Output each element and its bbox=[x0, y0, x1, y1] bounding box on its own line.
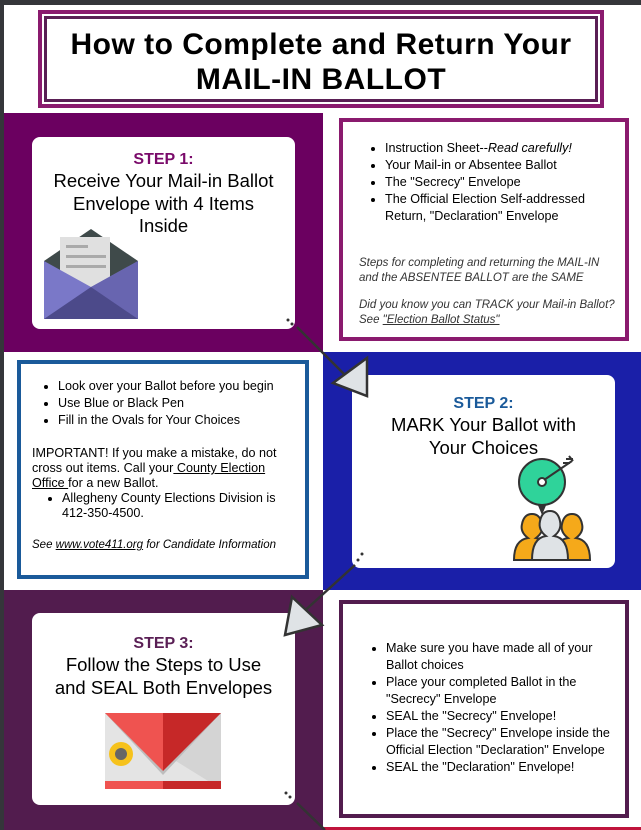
panel: step 2 instructions box: See www.vote411.org for Candidate Information bbox=[32, 539, 276, 551]
text: step 1 title bbox=[53, 170, 274, 236]
panel: step 1 items box: Your Mail-in or Absentee Ballot bbox=[385, 158, 557, 172]
text: step 3 title: and SEAL Both Envelopes bbox=[55, 676, 272, 698]
text: step 1 title: Inside bbox=[139, 215, 188, 236]
title: MAIL-IN BALLOT bbox=[196, 63, 446, 96]
text: step 3 title: Follow the Steps to Use bbox=[66, 654, 261, 675]
heading: step 1: STEP 1: bbox=[133, 151, 194, 168]
icon: target and people bbox=[513, 455, 591, 561]
panel: step 3 background bbox=[4, 590, 323, 830]
panel: step 2 background bbox=[323, 352, 641, 590]
panel: step 3 card bbox=[32, 613, 295, 805]
title bbox=[38, 10, 604, 108]
panel: step 2 instructions box bbox=[17, 360, 309, 579]
heading: step 3: STEP 3: bbox=[133, 635, 194, 652]
panel: step 2 instructions box: Use Blue or Black Pen bbox=[58, 396, 184, 410]
text: step 1 title: Envelope with 4 Items bbox=[73, 192, 254, 214]
panel: step 1 background bbox=[4, 113, 323, 352]
panel: step 3 instructions box: Make sure you have made all of your Ballot choices bbox=[386, 641, 593, 672]
text: step 3 title bbox=[55, 654, 272, 698]
title: How to Complete and Return Your bbox=[70, 28, 572, 61]
dark frame edges bbox=[0, 0, 641, 5]
panel: step 1 items box: The Official Election Self-addressed Return, "Declaration" Envelope bbox=[385, 192, 585, 223]
panel: step 2 instructions box: Fill in the Ovals for Your Choices bbox=[58, 413, 240, 427]
panel: step 1 items box bbox=[339, 118, 629, 341]
panel: step 2 instructions box: Allegheny County Elections Division is 412-350-4500. bbox=[62, 491, 276, 520]
panel: step 3 instructions box: Place your completed Ballot in the "Secrecy" Envelope bbox=[386, 675, 576, 706]
panel: step 3 instructions box: SEAL the "Secrecy" Envelope! bbox=[386, 709, 556, 723]
panel: step 1 items box: The "Secrecy" Envelope bbox=[385, 175, 521, 189]
panel: step 3 instructions box bbox=[339, 600, 629, 818]
panel: step 2 card bbox=[352, 375, 615, 568]
panel: step 1 items box: Did you know you can TRACK your Mail-in Ballot? See "Election Ballot Status" bbox=[359, 299, 615, 326]
panel: step 1 card bbox=[32, 137, 295, 329]
heading: step 2: STEP 2: bbox=[453, 395, 514, 412]
text: step 2 title: MARK Your Ballot with bbox=[391, 414, 576, 435]
text: step 2 title: Your Choices bbox=[429, 436, 538, 458]
icon: sealed envelope bbox=[105, 713, 221, 789]
text: step 1 title: Receive Your Mail-in Ballot bbox=[53, 170, 274, 191]
text: step 2 title bbox=[391, 414, 576, 458]
panel: step 3 instructions box: Place the "Secrecy" Envelope inside the Official Election "Declaration" Envelope bbox=[386, 726, 610, 757]
panel: step 2 instructions box: IMPORTANT! If you make a mistake, do not cross out items. Call your County Election Office for a new Ballot. bbox=[32, 446, 276, 490]
icon: open envelope bbox=[44, 229, 138, 319]
panel: step 1 items box: Steps for completing and returning the MAIL-IN and the ABSENTEE BALLOT are the SAME bbox=[359, 257, 599, 284]
panel: step 1 items box: Instruction Sheet--Read carefully! bbox=[385, 141, 572, 155]
panel: step 2 instructions box: Look over your Ballot before you begin bbox=[58, 379, 274, 393]
panel: step 3 instructions box: SEAL the "Declaration" Envelope! bbox=[386, 760, 574, 774]
decorative bottom red line bbox=[323, 827, 641, 830]
